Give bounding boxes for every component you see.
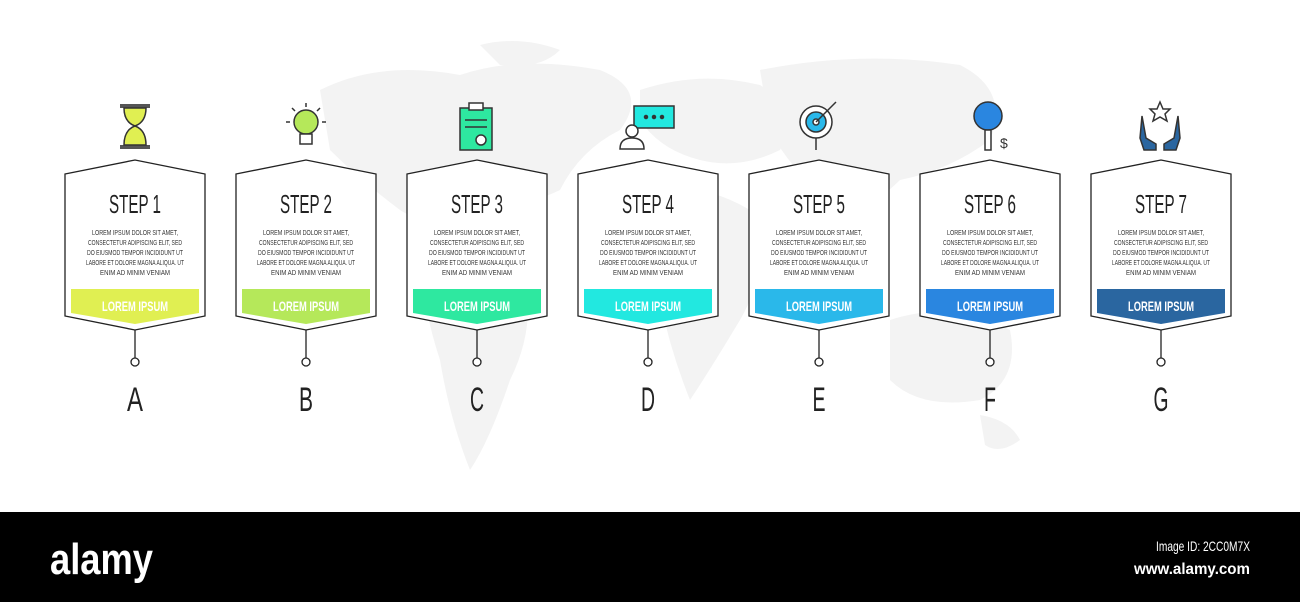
step 3 [407,103,547,419]
step 2 [236,103,376,419]
panel: LOREM IPSUM [102,298,168,314]
icon: person with chat [620,106,674,149]
panel: CONSECTETUR ADIPISCING ELIT, SED [601,238,695,247]
world map background [320,41,1020,470]
step 1 [65,104,205,419]
connector + letter D [641,330,655,419]
panel: LOREM IPSUM DOLOR SIT AMET, [92,228,178,237]
panel: LABORE ET DOLORE MAGNA ALIQUA. UT [941,258,1039,267]
connector + letter F [984,330,996,419]
step 4 [578,106,718,419]
panel: ENIM AD MINIM VENIAM [784,268,854,277]
panel: DO EIUSMOD TEMPOR INCIDIDUNT UT [771,248,867,257]
panel: LOREM IPSUM DOLOR SIT AMET, [947,228,1033,237]
icon: hands with star [1140,102,1180,150]
icon: magnifier with dollar [974,102,1008,151]
panel: LOREM IPSUM [1128,298,1194,314]
panel: STEP 7 [1135,189,1187,219]
panel: LABORE ET DOLORE MAGNA ALIQUA. UT [428,258,526,267]
panel: STEP 3 [451,189,503,219]
panel [65,160,205,330]
connector + letter G [1154,330,1168,419]
footer bar [0,512,1300,602]
panel: LABORE ET DOLORE MAGNA ALIQUA. UT [599,258,697,267]
panel: DO EIUSMOD TEMPOR INCIDIDUNT UT [87,248,183,257]
panel: STEP 1 [109,189,161,219]
panel: LOREM IPSUM DOLOR SIT AMET, [776,228,862,237]
panel: CONSECTETUR ADIPISCING ELIT, SED [772,238,866,247]
panel: STEP 2 [280,189,332,219]
panel: STEP 5 [793,189,845,219]
icon: clipboard [460,103,492,150]
panel: LOREM IPSUM [273,298,339,314]
panel: STEP 4 [622,189,674,219]
panel: DO EIUSMOD TEMPOR INCIDIDUNT UT [258,248,354,257]
connector + letter E [812,330,826,419]
icon: light bulb [286,103,326,144]
step 6 [920,102,1060,419]
panel: DO EIUSMOD TEMPOR INCIDIDUNT UT [942,248,1038,257]
panel: LOREM IPSUM DOLOR SIT AMET, [1118,228,1204,237]
panel: CONSECTETUR ADIPISCING ELIT, SED [259,238,353,247]
panel: LOREM IPSUM [615,298,681,314]
panel: CONSECTETUR ADIPISCING ELIT, SED [1114,238,1208,247]
connector + letter B: B [299,381,313,419]
step 7 [1091,102,1231,419]
icon: hourglass [120,104,150,149]
panel: DO EIUSMOD TEMPOR INCIDIDUNT UT [600,248,696,257]
connector + letter F: F [984,381,996,419]
icon: target [800,102,836,150]
panel [407,160,547,330]
panel [1091,160,1231,330]
panel: ENIM AD MINIM VENIAM [955,268,1025,277]
panel [578,160,718,330]
connector + letter B [299,330,313,419]
panel: ENIM AD MINIM VENIAM [613,268,683,277]
connector + letter D: D [641,381,655,419]
panel [920,160,1060,330]
connector + letter A: A [127,381,143,419]
panel: LOREM IPSUM [444,298,510,314]
panel: LABORE ET DOLORE MAGNA ALIQUA. UT [770,258,868,267]
connector + letter G: G [1154,381,1168,419]
panel: DO EIUSMOD TEMPOR INCIDIDUNT UT [1113,248,1209,257]
image id: Image ID: 2CC0M7X [1156,538,1250,554]
panel: CONSECTETUR ADIPISCING ELIT, SED [430,238,524,247]
panel: LOREM IPSUM [957,298,1023,314]
panel: ENIM AD MINIM VENIAM [271,268,341,277]
panel: LOREM IPSUM DOLOR SIT AMET, [605,228,691,237]
panel: LOREM IPSUM DOLOR SIT AMET, [263,228,349,237]
panel: LABORE ET DOLORE MAGNA ALIQUA. UT [1112,258,1210,267]
panel: DO EIUSMOD TEMPOR INCIDIDUNT UT [429,248,525,257]
panel: LABORE ET DOLORE MAGNA ALIQUA. UT [257,258,355,267]
panel: ENIM AD MINIM VENIAM [1126,268,1196,277]
panel: CONSECTETUR ADIPISCING ELIT, SED [943,238,1037,247]
panel: ENIM AD MINIM VENIAM [100,268,170,277]
step 5 [749,102,889,419]
connector + letter A [127,330,143,419]
connector + letter E: E [812,381,826,419]
panel [749,160,889,330]
panel: LABORE ET DOLORE MAGNA ALIQUA. UT [86,258,184,267]
icon: magnifier with dollar: $ [1000,135,1008,151]
logo: alamy [50,535,153,584]
connector + letter C: C [470,381,484,419]
panel: CONSECTETUR ADIPISCING ELIT, SED [88,238,182,247]
panel: LOREM IPSUM DOLOR SIT AMET, [434,228,520,237]
panel: ENIM AD MINIM VENIAM [442,268,512,277]
url: www.alamy.com [1133,561,1250,578]
panel: LOREM IPSUM [786,298,852,314]
panel: STEP 6 [964,189,1016,219]
panel [236,160,376,330]
connector + letter C [470,330,484,419]
